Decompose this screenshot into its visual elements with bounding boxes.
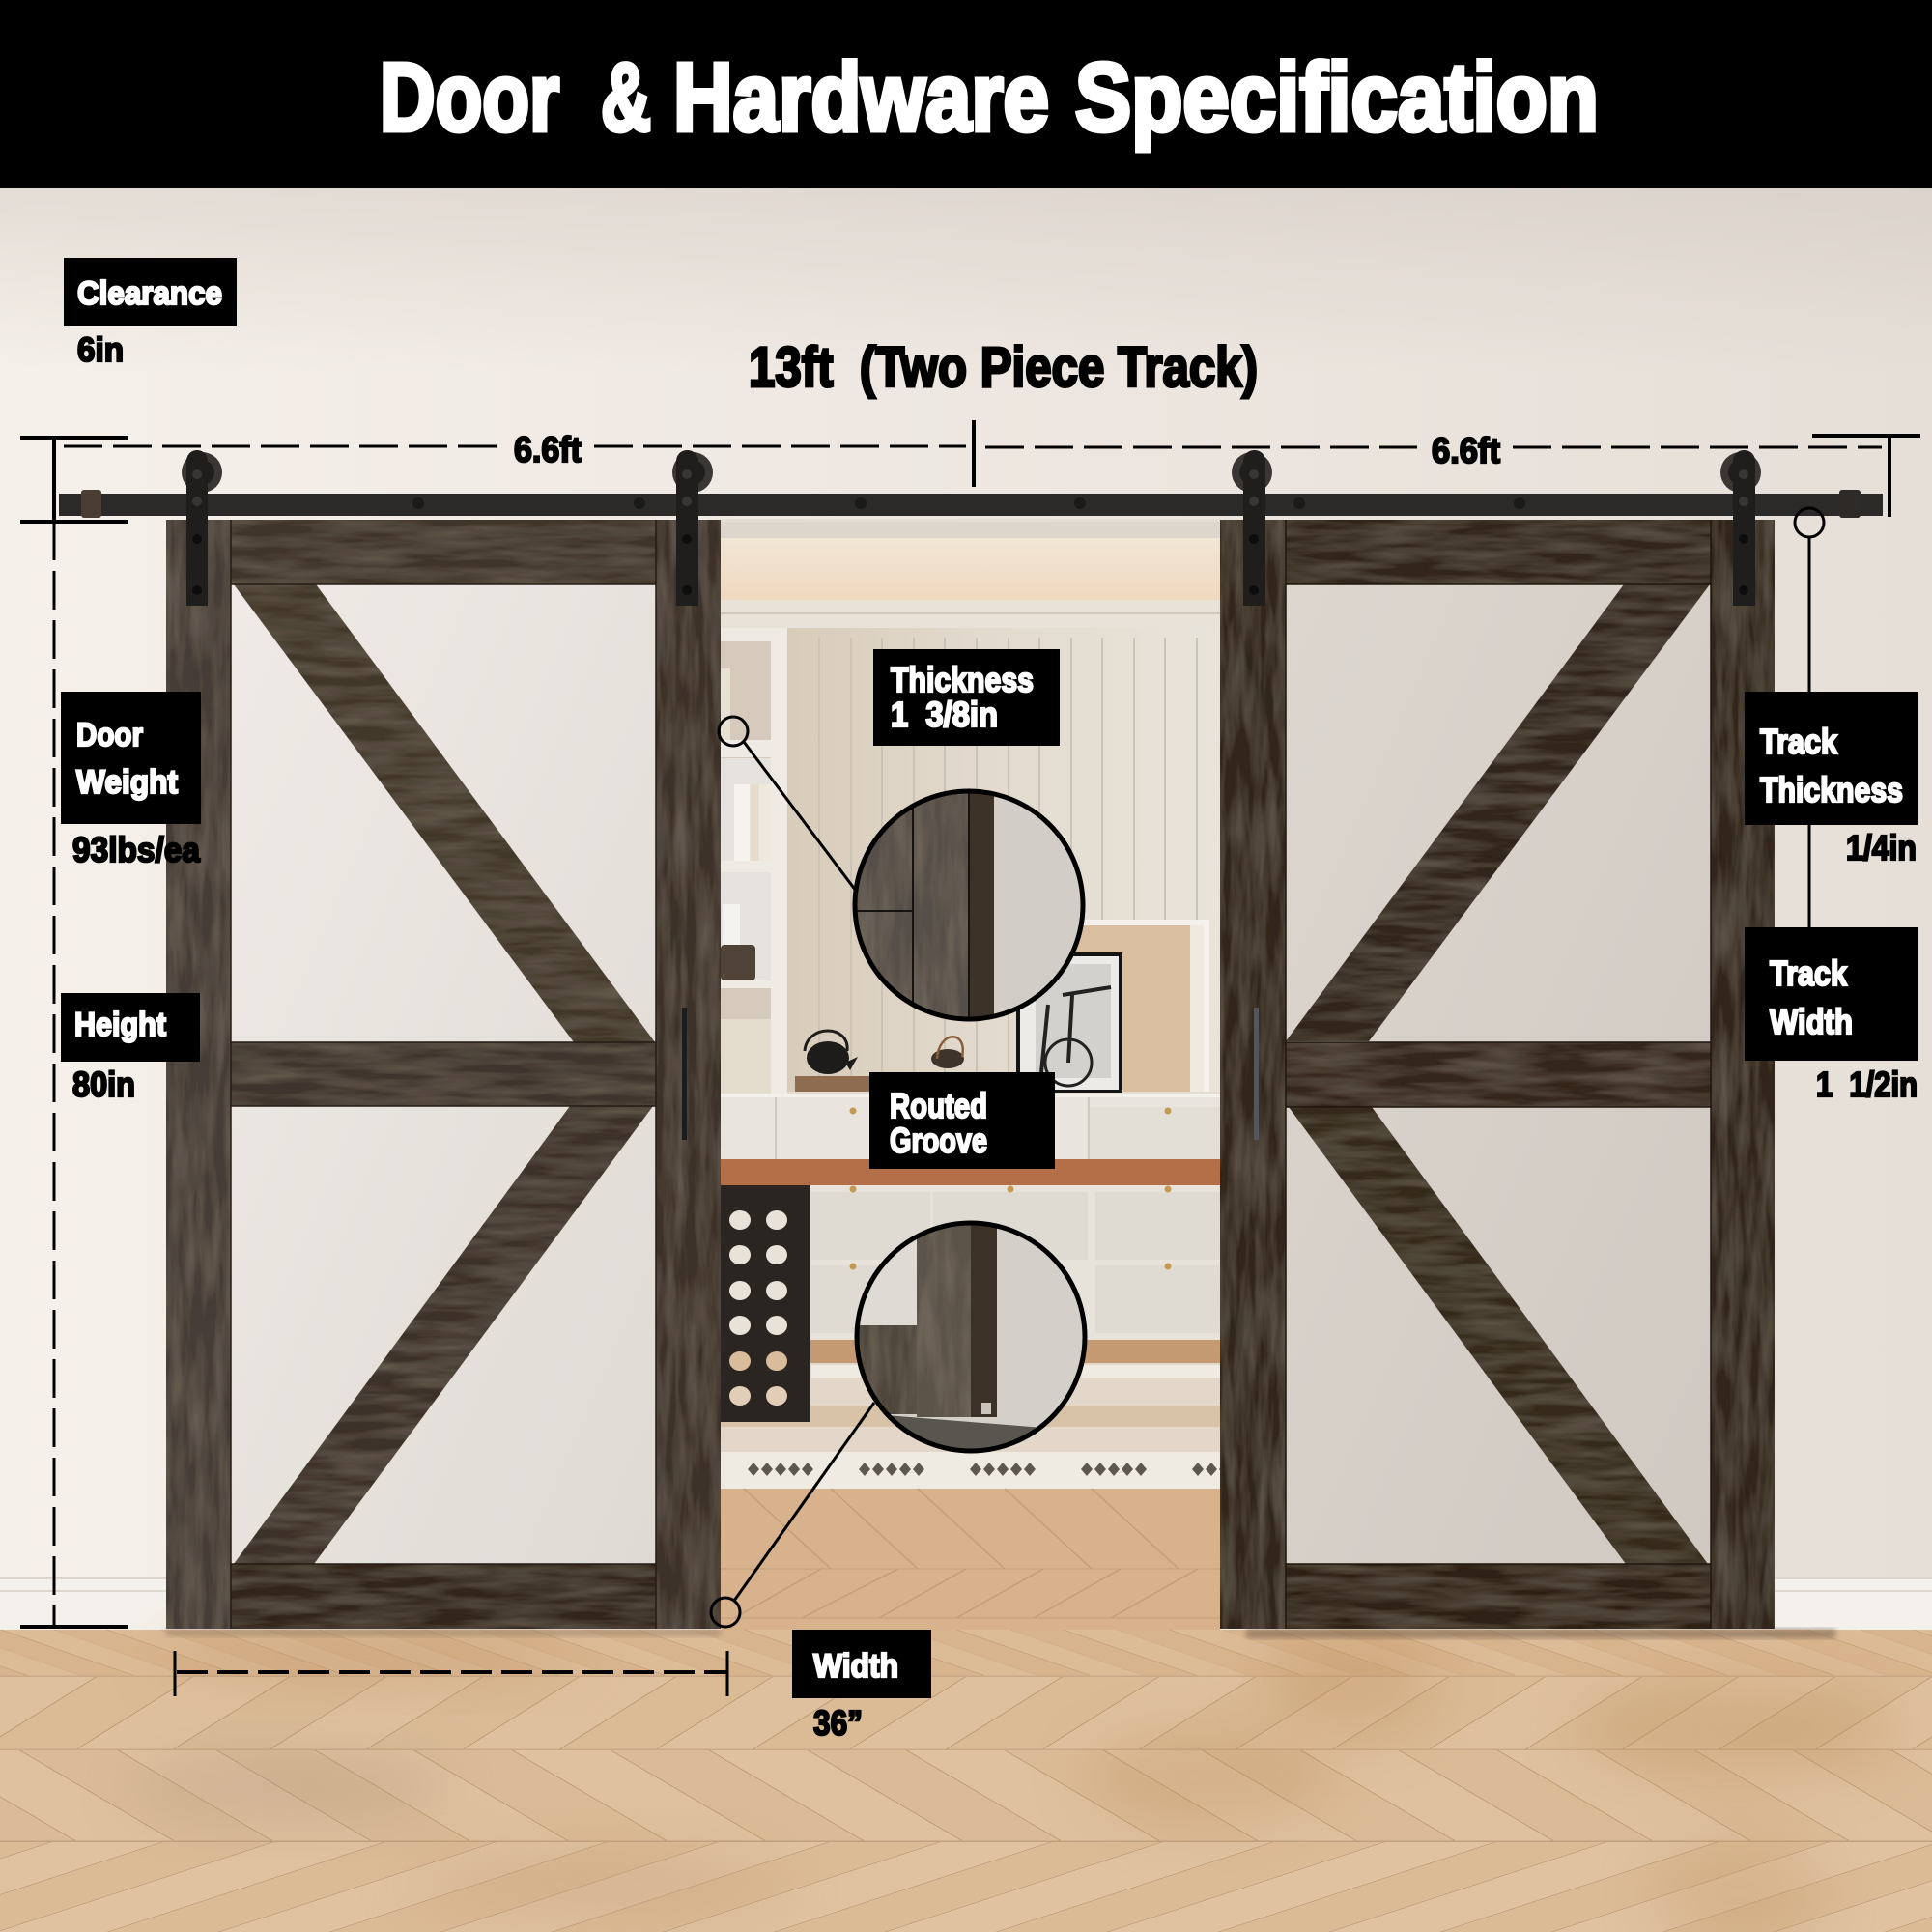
thickness label: Thickness xyxy=(891,660,1034,699)
door height dimension line xyxy=(20,522,128,1627)
height label: Height xyxy=(74,1007,166,1043)
track width label: Width xyxy=(1770,1002,1853,1041)
left door panels xyxy=(232,584,656,1564)
interior room seen through the opening xyxy=(721,519,1220,1630)
magnifier: routed groove xyxy=(850,1219,1092,1459)
door width dimension xyxy=(175,1651,727,1696)
width label: Width xyxy=(813,1648,898,1685)
herringbone wood floor xyxy=(0,1623,1932,1932)
perforated black desk leg xyxy=(721,1185,810,1422)
header bar with title: & xyxy=(601,43,651,152)
header bar with title xyxy=(0,0,1932,188)
framed pictures xyxy=(1016,920,1209,1093)
hanger straps xyxy=(182,450,1761,606)
clearance label: Clearance xyxy=(77,275,222,312)
clearance label xyxy=(64,258,237,369)
left barn door xyxy=(166,520,721,1629)
left span value: 6.6ft xyxy=(514,430,582,469)
track width label: 1 1/2in xyxy=(1816,1065,1918,1104)
rug and inner floor xyxy=(721,1340,1220,1630)
right barn door xyxy=(1220,520,1775,1629)
thickness label: 1 3/8in xyxy=(891,695,998,734)
callout pointer: routed groove xyxy=(711,1403,874,1627)
track thickness label: Track xyxy=(1760,722,1838,761)
height label: 80in xyxy=(72,1065,135,1104)
bookcase xyxy=(721,628,787,1094)
right door panels xyxy=(1286,584,1711,1564)
door weight label: 93lbs/ea xyxy=(72,830,201,869)
magnifier: door thickness xyxy=(850,787,1092,1024)
cast iron kettle and tray xyxy=(795,1031,964,1092)
right door diagonals and rails xyxy=(1286,520,1711,1629)
right span value: 6.6ft xyxy=(1432,431,1500,470)
routed groove label xyxy=(869,1072,1055,1169)
clearance label: 6in xyxy=(77,331,124,369)
track length heading: 13ft (Two Piece Track) xyxy=(749,336,1258,399)
callout pointer: door thickness xyxy=(719,717,856,891)
routed groove label: Routed xyxy=(890,1086,987,1125)
left door handle xyxy=(682,1008,687,1140)
track thickness label: Thickness xyxy=(1760,770,1903,810)
left door diagonals and rails xyxy=(231,520,656,1629)
track thickness label: 1/4in xyxy=(1846,828,1917,867)
header bar with title: Hardware xyxy=(673,43,1049,152)
door weight label: Weight xyxy=(76,764,178,801)
thickness label xyxy=(873,649,1060,746)
right door stiles xyxy=(1220,520,1775,1629)
right door handle xyxy=(1254,1008,1259,1140)
wall background xyxy=(0,188,1932,1633)
lower cabinets xyxy=(721,1094,1220,1340)
left door stiles xyxy=(166,520,721,1629)
routed groove label: Groove xyxy=(890,1121,987,1160)
track width label: Track xyxy=(1770,953,1848,993)
track width label xyxy=(1745,927,1918,1104)
door weight label: Door xyxy=(76,717,143,753)
track thickness label xyxy=(1745,692,1918,867)
header bar with title: Specification xyxy=(1075,43,1599,152)
track callout marker and line xyxy=(1795,508,1824,927)
door weight label xyxy=(61,692,201,869)
height label xyxy=(61,993,200,1104)
width label: 36” xyxy=(813,1703,863,1743)
width label xyxy=(792,1630,931,1743)
wood counter top xyxy=(721,1159,1220,1185)
door shadow on floor xyxy=(166,1629,1835,1638)
track dimension lines xyxy=(20,420,1920,522)
track end stops xyxy=(81,490,101,518)
barn door track xyxy=(59,490,1883,518)
header bar with title: Door xyxy=(380,43,559,152)
